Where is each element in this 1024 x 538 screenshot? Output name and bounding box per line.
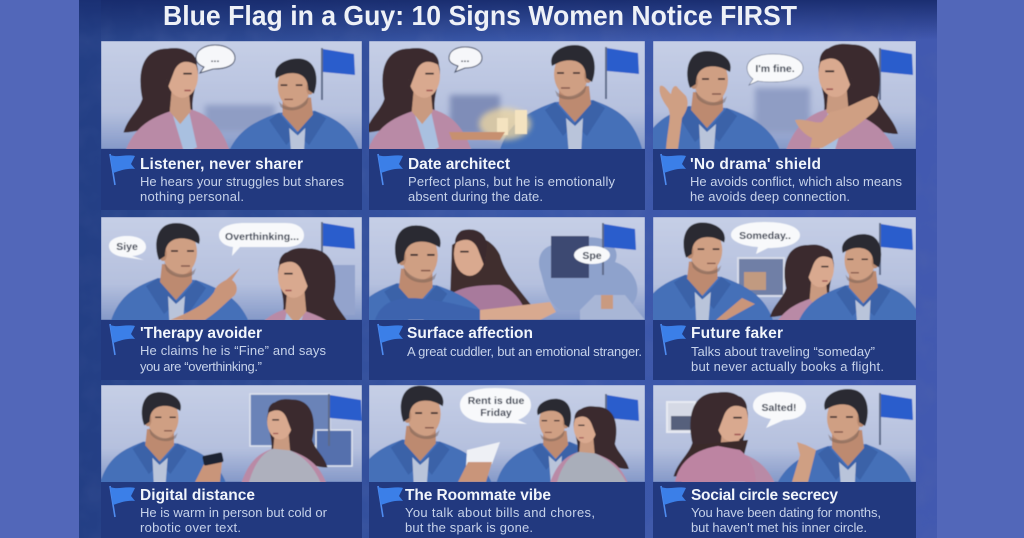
caption: therapy avoider: you are “overthinking.”: [140, 359, 262, 374]
caption: digital distance: He is warm in person but cold or: [140, 505, 328, 520]
illustration: woman and man talking: ...: [211, 53, 219, 65]
caption: therapy avoider: [101, 320, 362, 380]
panel: listener, never sharer: [101, 41, 366, 210]
caption: roommate: The Roommate vibe: [405, 487, 551, 504]
illustration: man pointing at woman: [101, 217, 362, 320]
caption: future faker: Talks about traveling “someday”: [691, 344, 875, 359]
illustration: man with bill and couple: [369, 385, 645, 482]
panel: social circle secrecy: [653, 385, 920, 538]
panel: therapy avoider: [101, 217, 362, 385]
illustration: man speaking with couple and TV: [653, 217, 916, 320]
illustration: man pointing at woman: Overthinking...: [225, 231, 299, 243]
illustration: man says I'm fine: I'm fine.: [755, 63, 795, 75]
panel: no drama shield: [635, 41, 916, 210]
caption: date architect: Date architect: [408, 156, 510, 173]
caption: no drama: 'No drama' shield: [690, 156, 821, 173]
illustration: man on phone and distant woman: [101, 385, 362, 482]
illustration: candlelit dinner: ...: [461, 53, 469, 65]
title: Blue Flag in a Guy: 10 Signs Women Notice FIRST: [163, 0, 797, 31]
caption: social circle: [653, 482, 916, 538]
panel: surface affection: [340, 217, 645, 380]
illustration: man with bill and couple: Rent is due: [468, 395, 524, 407]
panel: date architect: [361, 41, 647, 210]
caption: therapy avoider: He claims he is “Fine” and says: [140, 343, 326, 358]
panel: the roommate vibe: [350, 385, 645, 538]
caption: listener: Listener, never sharer: [140, 156, 303, 173]
caption: digital distance: robotic over text.: [140, 520, 241, 535]
caption: no drama: He avoids conflict, which also means: [690, 174, 902, 189]
illustration: man says I'm fine: [653, 41, 916, 149]
caption: no drama: [653, 149, 916, 210]
caption: listener: [101, 149, 362, 210]
caption: surface affection: A great cuddler, but an emotional stranger.: [407, 344, 642, 359]
illustration: couple embracing with thought cloud: Spe: [582, 250, 602, 262]
caption: roommate: [369, 482, 645, 538]
caption: future faker: Future faker: [691, 325, 783, 342]
caption: social circle: but haven't met his inner circle.: [691, 520, 867, 535]
illustration: man speaking with couple and TV: Someday..: [739, 230, 791, 242]
caption: date architect: Perfect plans, but he is emotionally: [408, 174, 616, 189]
caption: future faker: but never actually books a flight.: [691, 359, 884, 374]
caption: future faker: [653, 320, 916, 380]
illustration: couple embracing with thought cloud: [369, 217, 645, 320]
caption: listener: nothing personal.: [140, 189, 244, 204]
caption: date architect: [369, 149, 645, 210]
illustration: woman and man at a party: Salted!: [761, 402, 797, 414]
caption: roommate: but the spark is gone.: [405, 520, 533, 535]
caption: listener: He hears your struggles but shares: [140, 174, 344, 189]
illustration: man with bill and couple: Friday: [480, 407, 512, 419]
illustration: woman and man at a party: [653, 385, 916, 482]
illustration: man pointing at woman: Siye: [116, 241, 138, 253]
illustration: woman and man talking: [101, 41, 362, 149]
caption: digital distance: Digital distance: [140, 487, 255, 504]
panel: future faker: [653, 217, 916, 380]
caption: surface affection: [369, 320, 645, 380]
caption: therapy avoider: 'Therapy avoider: [140, 325, 262, 342]
caption: social circle: You have been dating for months,: [691, 505, 881, 520]
caption: digital distance: [101, 482, 362, 538]
illustration: candlelit dinner: [369, 41, 645, 149]
caption: surface affection: Surface affection: [407, 325, 533, 342]
caption: no drama: he avoids deep connection.: [690, 189, 850, 204]
caption: date architect: absent during the date.: [408, 189, 543, 204]
caption: roommate: You talk about bills and chores,: [405, 505, 595, 520]
panel: digital distance: [95, 385, 362, 538]
caption: social circle: Social circle secrecy: [691, 487, 838, 504]
